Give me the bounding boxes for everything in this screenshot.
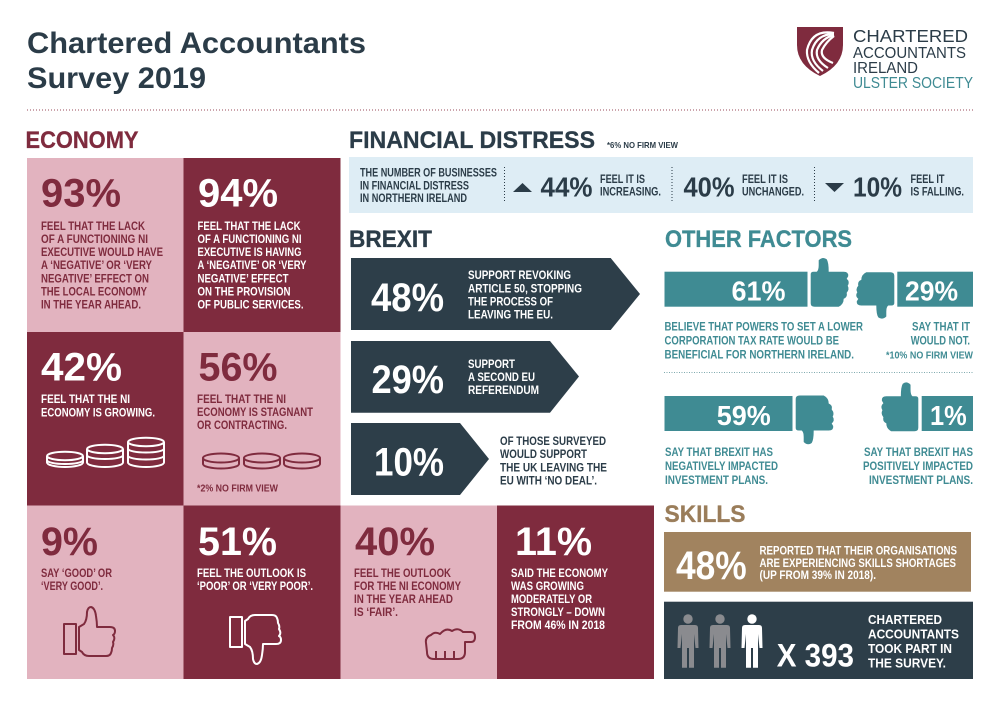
- panel: 9%: SAY ‘GOOD’ OR: [41, 568, 113, 580]
- text: positively impacted: SAY THAT BREXIT HAS: [864, 447, 973, 459]
- stat: 10% falling: FEEL IT: [910, 174, 944, 186]
- panel: 11%: SAID THE ECONOMY: [511, 568, 608, 580]
- arrow: 48% revoke article 50: 48%: [371, 276, 444, 320]
- strip label: THE NUMBER OF BUSINESSES: [360, 168, 497, 180]
- logo text: ULSTER SOCIETY: [853, 75, 973, 92]
- text: would not: WOULD NOT.: [911, 336, 970, 348]
- stat: 40% unchanged: 40%: [684, 172, 735, 202]
- panel: 94%: ON THE PROVISION: [198, 286, 290, 298]
- title: [27, 27, 366, 95]
- panel: 93%: OF A FUNCTIONING NI: [41, 234, 148, 246]
- arrow: 29% second referendum: 29%: [372, 358, 444, 402]
- panel: 56%: 56%: [198, 346, 278, 390]
- text: negatively impacted: INVESTMENT PLANS.: [665, 475, 768, 487]
- icon: rising stacks of coins: [47, 438, 164, 467]
- stat: 1% thumbs up: [881, 382, 973, 431]
- panel: 11%: STRONGLY – DOWN: [511, 607, 605, 619]
- panel: 56%: FEEL THAT THE NI: [197, 394, 286, 406]
- icon: thumb up outline: [64, 607, 115, 656]
- panel: 94%: OF PUBLIC SERVICES.: [198, 300, 304, 312]
- arrow: 48% revoke article 50: [351, 258, 640, 330]
- arrow: 29% second referendum: A SECOND EU: [468, 372, 535, 384]
- text: positively impacted: INVESTMENT PLANS.: [869, 475, 973, 487]
- panel: 94%: A ‘NEGATIVE’ OR ‘VERY: [198, 260, 307, 272]
- logo text: [853, 26, 973, 92]
- arrow: 29% second referendum: SUPPORT: [468, 359, 515, 371]
- logo text: IRELAND: [853, 60, 918, 77]
- panel: skills shortages: (UP FROM 39% IN 2018).: [760, 570, 876, 582]
- heading: brexit: BREXIT: [349, 226, 432, 253]
- stat: 40% unchanged: UNCHANGED.: [742, 186, 804, 198]
- panel: 9%: ‘VERY GOOD’.: [41, 581, 103, 593]
- panel: 94%: 94%: [198, 172, 278, 216]
- icon: shield: [797, 27, 843, 76]
- stat: 10% falling: IS FALLING.: [910, 186, 964, 198]
- text: would not: [886, 322, 973, 362]
- panel: 40%: [340, 506, 497, 679]
- no deal text: THE UK LEAVING THE: [500, 462, 607, 474]
- no deal text: [500, 436, 607, 488]
- heading: financial distress: FINANCIAL DISTRESS: [349, 127, 595, 154]
- stat: 44% increasing: INCREASING.: [600, 186, 661, 198]
- stat: 10% falling: [825, 172, 964, 202]
- panel: 40%: IS ‘FAIR’.: [354, 607, 398, 619]
- stat: 29% thumbs down: 29%: [905, 276, 958, 307]
- heading: skills: SKILLS: [664, 501, 746, 528]
- icon: three people: [678, 614, 762, 668]
- panel: 94%: OF A FUNCTIONING NI: [198, 234, 302, 246]
- stat: 1% thumbs up: 1%: [930, 400, 967, 431]
- icon: thumb down outline: [230, 615, 281, 664]
- panel: 93%: EXECUTIVE WOULD HAVE: [41, 247, 163, 259]
- strip label: IN NORTHERN IRELAND: [360, 193, 467, 205]
- arrow: 48% revoke article 50: SUPPORT REVOKING: [468, 270, 571, 282]
- no deal text: OF THOSE SURVEYED: [500, 436, 606, 448]
- panel: 393 participants: ACCOUNTANTS: [868, 626, 959, 642]
- panel: 93%: 93%: [41, 172, 121, 216]
- panel: 11%: FROM 46% IN 2018: [511, 620, 606, 632]
- panel: 42%: ECONOMY IS GROWING.: [41, 408, 155, 420]
- panel: skills shortages: 48%: [676, 544, 747, 588]
- arrow: 10% no deal: 10%: [374, 440, 444, 484]
- stat: 61% thumbs up: 61%: [732, 276, 786, 307]
- arrow: 29% second referendum: REFERENDUM: [468, 385, 539, 397]
- panel: 93%: IN THE YEAR AHEAD.: [41, 300, 141, 312]
- panel: 56%: OR CONTRACTING.: [197, 420, 287, 432]
- stat: 40% unchanged: FEEL IT IS: [742, 174, 788, 186]
- panel: 51%: [184, 506, 340, 679]
- panel: 56%: ECONOMY IS STAGNANT: [197, 407, 313, 419]
- title: Survey 2019: [27, 62, 206, 95]
- arrow: 48% revoke article 50: THE PROCESS OF: [468, 296, 553, 308]
- logo text: CHARTERED: [853, 26, 968, 46]
- panel: 93%: THE LOCAL ECONOMY: [41, 286, 147, 298]
- stat: 44% increasing: FEEL IT IS: [600, 174, 645, 186]
- strip label: [360, 168, 497, 205]
- panel: 42%: FEEL THAT THE NI: [41, 394, 130, 406]
- panel: 94%: [184, 158, 340, 332]
- panel: 393 participants: THE SURVEY.: [868, 656, 946, 670]
- stat: 29% thumbs down: [856, 272, 973, 319]
- note: 6% no firm view: *6% NO FIRM VIEW: [607, 140, 679, 150]
- stat: 40% unchanged: [684, 172, 804, 202]
- panel: 51%: 51%: [198, 520, 277, 564]
- panel: 56%: *2% NO FIRM VIEW: [197, 484, 278, 494]
- panel: 51%: ‘POOR’ OR ‘VERY POOR’.: [197, 581, 313, 593]
- text: would not: SAY THAT IT: [912, 322, 970, 334]
- text: positively impacted: POSITIVELY IMPACTED: [863, 461, 973, 473]
- panel: 93%: NEGATIVE’ EFFECT ON: [41, 274, 149, 286]
- stat: 59% thumbs down: 59%: [717, 400, 771, 431]
- no deal text: WOULD SUPPORT: [500, 449, 587, 461]
- panel: 393 participants: [664, 602, 973, 679]
- panel: 93%: [27, 158, 184, 332]
- icon: sideways fist: [426, 629, 475, 659]
- arrow: 10% no deal: [351, 423, 607, 495]
- stat: 61% thumbs up: [664, 258, 849, 307]
- panel: skills shortages: ARE EXPERIENCING SKILLS SHORTAGES: [760, 558, 956, 570]
- panel: 11%: MODERATELY OR: [511, 594, 593, 606]
- panel: 11%: 11%: [515, 520, 592, 564]
- panel: 11%: WAS GROWING: [511, 581, 584, 593]
- panel: 393 participants: TOOK PART IN: [868, 641, 952, 656]
- panel: 40%: FEEL THE OUTLOOK: [354, 568, 452, 580]
- panel: 42%: [27, 332, 184, 506]
- panel: 56%: [184, 332, 340, 506]
- no deal text: EU WITH ‘NO DEAL’.: [500, 476, 597, 488]
- text: negatively impacted: SAY THAT BREXIT HAS: [665, 447, 773, 459]
- stat: 59% thumbs down: [664, 396, 834, 444]
- logo: Chartered Accountants Ireland Ulster Society: [797, 26, 973, 92]
- text: positively impacted: [863, 447, 973, 487]
- text: would not: *10% NO FIRM VIEW: [886, 350, 973, 362]
- panel: 40%: IN THE YEAR AHEAD: [354, 594, 453, 606]
- panel: skills shortages: REPORTED THAT THEIR ORGANISATIONS: [760, 546, 957, 558]
- panel: 393 participants: X 393: [777, 638, 854, 674]
- arrow: 48% revoke article 50: ARTICLE 50, STOPPING: [468, 284, 582, 296]
- heading: economy: ECONOMY: [26, 127, 138, 154]
- panel: 40%: 40%: [355, 520, 435, 564]
- text: negatively impacted: NEGATIVELY IMPACTED: [665, 461, 778, 473]
- title: Chartered Accountants: [27, 27, 366, 60]
- panel: 9%: [27, 506, 184, 679]
- text: corporation tax: CORPORATION TAX RATE WOULD BE: [664, 336, 839, 348]
- heading: other factors: OTHER FACTORS: [665, 226, 852, 253]
- stat: 44% increasing: [513, 172, 661, 202]
- text: corporation tax: BENEFICIAL FOR NORTHERN IRELAND.: [664, 350, 854, 362]
- arrow: 48% revoke article 50: LEAVING THE EU.: [468, 310, 553, 322]
- panel: 9%: 9%: [41, 520, 98, 564]
- text: negatively impacted: [665, 447, 778, 487]
- panel: 42%: 42%: [41, 346, 122, 390]
- panel: 93%: FEEL THAT THE LACK: [41, 221, 146, 233]
- panel: 94%: NEGATIVE’ EFFECT: [198, 274, 288, 286]
- logo text: ACCOUNTANTS: [853, 45, 966, 62]
- panel: 94%: FEEL THAT THE LACK: [198, 221, 301, 233]
- panel: 40%: FOR THE NI ECONOMY: [354, 581, 461, 593]
- stat: 44% increasing: 44%: [540, 172, 593, 202]
- text: corporation tax: [664, 322, 864, 362]
- panel: financial distress strip: [349, 157, 973, 213]
- panel: 11%: [497, 506, 654, 679]
- arrow: 29% second referendum: [351, 341, 579, 413]
- strip label: IN FINANCIAL DISTRESS: [360, 180, 469, 192]
- panel: skills shortages: [664, 532, 971, 592]
- panel: 93%: A ‘NEGATIVE’ OR ‘VERY: [41, 260, 152, 272]
- panel: 94%: EXECUTIVE IS HAVING: [198, 247, 302, 259]
- text: corporation tax: BELIEVE THAT POWERS TO SET A LOWER: [664, 322, 864, 334]
- stat: 10% falling: 10%: [853, 172, 902, 202]
- panel: 51%: FEEL THE OUTLOOK IS: [197, 568, 306, 580]
- icon: flat coins: [203, 454, 320, 468]
- panel: 393 participants: CHARTERED: [868, 612, 942, 627]
